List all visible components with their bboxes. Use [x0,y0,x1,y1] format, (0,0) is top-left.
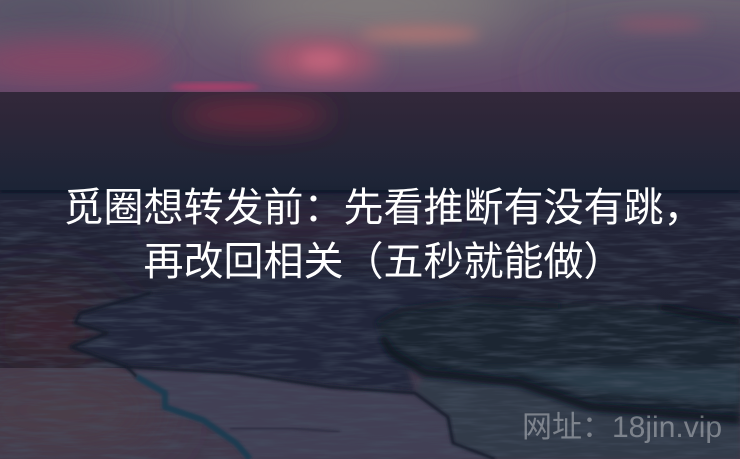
water foam and waves [0,189,740,459]
title: 再改回相关（五秒就能做） [144,240,624,284]
title: 觅圈想转发前：先看推断有没有跳， [64,186,704,230]
lower band with lighter sand [0,365,740,459]
sky band [0,0,740,96]
title [64,186,704,284]
darkened middle band with sea [0,92,740,375]
watermark: 网址：18jin.vip [522,411,722,444]
